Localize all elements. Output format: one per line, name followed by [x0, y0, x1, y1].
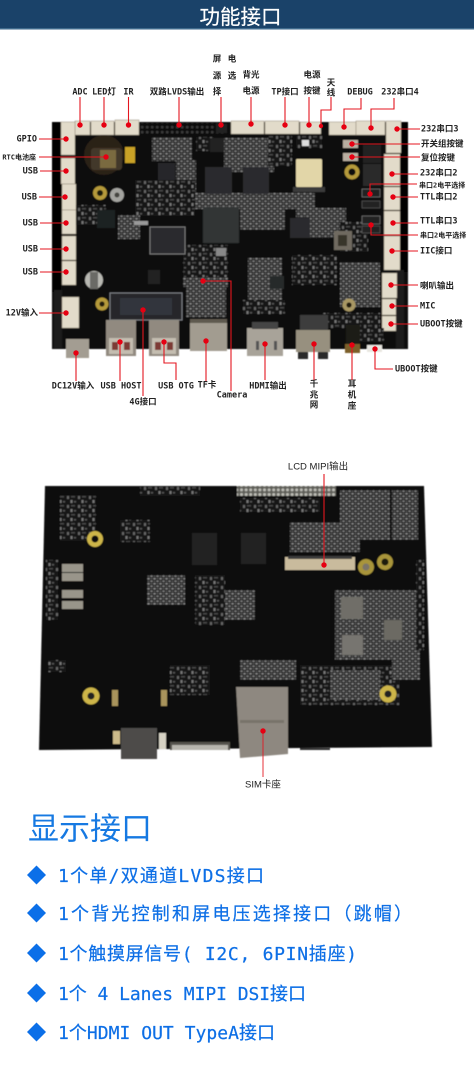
label: UBOOT 1: UBOOT按键 — [420, 318, 463, 330]
label: HDMI: HDMI输出 — [249, 380, 287, 392]
label: gigabit ethernet: 兆 — [310, 390, 319, 400]
label: gigabit ethernet — [310, 378, 319, 410]
label: speaker: 喇叭输出 — [420, 280, 454, 292]
label: TF card: TF卡 — [198, 380, 217, 390]
label: RTC battery: RTC电池座 — [2, 152, 36, 162]
label: screen power select: 屏 — [213, 54, 222, 64]
label: screen power select: 选 — [228, 70, 237, 82]
label: screen power select: 电 — [228, 54, 237, 64]
label: USB 2: USB — [22, 192, 37, 202]
label: USB 5: USB — [23, 268, 38, 278]
label: USB HOST: USB HOST — [101, 382, 141, 392]
label: power button — [303, 70, 321, 96]
item: touch: 1个触摸屏信号( I2C, 6PIN插座) — [58, 944, 357, 965]
title: 功能接口 — [200, 0, 282, 30]
callouts: left edge — [2, 134, 109, 318]
label: UBOOT 2: UBOOT按键 — [395, 364, 438, 374]
label: level select 2: 串口2电平选择 — [420, 230, 466, 240]
label: LED: LED灯 — [92, 86, 116, 98]
label: Camera: Camera — [217, 390, 247, 400]
photo: board back — [39, 486, 432, 759]
callouts: right edge — [349, 124, 466, 330]
leader lines: right — [352, 129, 420, 324]
callouts: bottom edge — [52, 278, 438, 412]
label: headphone jack: 耳 — [348, 380, 357, 390]
callout: SIM: SIM卡座 — [245, 778, 281, 790]
item: MIPI: 1个 4 Lanes MIPI DSI接口 — [58, 984, 306, 1005]
label: RS232-4: 232串口4 — [381, 86, 419, 98]
label: LVDS: 双路LVDS输出 — [150, 86, 204, 98]
label: antenna: 线 — [327, 88, 336, 98]
label: screen power select: 择 — [213, 86, 222, 98]
label: screen power select: 源 — [213, 70, 222, 82]
label: USB 1: USB — [23, 166, 38, 176]
label: gigabit ethernet: 网 — [310, 400, 318, 410]
label: DC12V: DC12V输入 — [52, 380, 95, 392]
label: level select 1: 串口2电平选择 — [419, 180, 465, 190]
label: IR: IR — [123, 88, 134, 98]
label: ADC: ADC — [72, 88, 88, 98]
label: antenna — [327, 78, 336, 98]
leader dots: bottom — [73, 278, 378, 356]
leader dots: left — [62, 136, 109, 316]
feature list — [27, 866, 412, 1044]
leader lines: bottom — [76, 281, 393, 396]
item: HDMI: 1个HDMI OUT TypeA接口 — [58, 1023, 275, 1044]
label: IIC: IIC接口 — [420, 246, 452, 256]
callout: LCD MIPI — [288, 460, 348, 568]
photo: board front — [52, 120, 408, 359]
label: backlight power: 电源 — [242, 86, 260, 96]
label: USB 4: USB — [23, 244, 38, 254]
label: power button: 电源 — [303, 70, 321, 80]
label: DEBUG: DEBUG — [347, 88, 373, 98]
label: RS232-3: 232串口3 — [421, 124, 458, 134]
label: headphone jack — [348, 380, 357, 412]
header banner — [0, 0, 474, 30]
leader dots: right — [349, 126, 400, 327]
label: 4G: 4G接口 — [129, 396, 157, 408]
label: MIC: MIC — [420, 302, 435, 312]
label: switch group button: 开关组按键 — [421, 138, 464, 150]
label: TP: TP接口 — [271, 86, 299, 98]
leader lines: left — [39, 139, 106, 313]
label: USB OTG: USB OTG — [158, 382, 194, 392]
label: 12V input: 12V输入 — [6, 308, 38, 318]
label: headphone jack: 座 — [348, 400, 357, 412]
leader dots: top — [77, 121, 374, 131]
label: gigabit ethernet: 千 — [310, 378, 319, 390]
item: backlight: 1个背光控制和屏电压选择接口（跳帽） — [58, 904, 412, 925]
label: TTL-3: TTL串口3 — [420, 216, 457, 226]
label: RS232-2: 232串口2 — [420, 168, 457, 178]
label: TTL-2: TTL串口2 — [420, 192, 457, 202]
label: backlight power — [242, 70, 260, 96]
label: headphone jack: 机 — [348, 390, 357, 400]
label: power button: 按键 — [303, 86, 321, 96]
label: backlight power: 背光 — [242, 70, 260, 80]
heading: display interfaces: 显示接口 — [28, 804, 152, 848]
callouts: top edge — [72, 54, 419, 131]
callout: SIM — [245, 728, 281, 790]
callout: LCD MIPI: LCD MIPI输出 — [288, 460, 348, 472]
label: reset button: 复位按键 — [421, 152, 456, 164]
leader lines: top — [80, 97, 394, 128]
label: screen power select — [213, 54, 237, 98]
label: antenna: 天 — [327, 78, 336, 88]
label: USB 3: USB — [23, 218, 38, 228]
label: GPIO: GPIO — [17, 134, 37, 144]
item: LVDS: 1个单/双通道LVDS接口 — [58, 866, 264, 887]
